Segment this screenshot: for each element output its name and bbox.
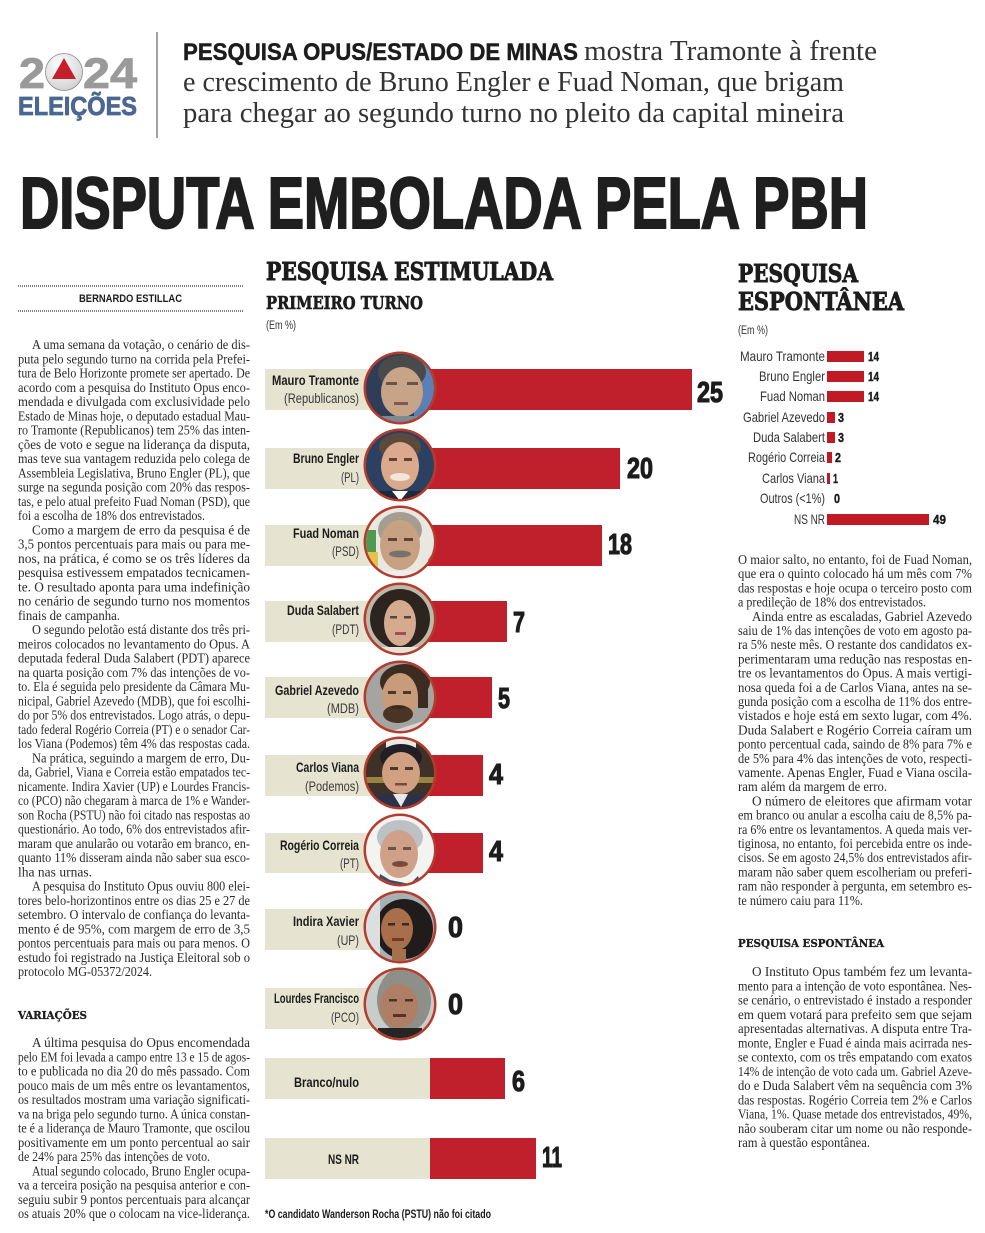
text block: right column article: ra 5% neste mês. O restante dos candidatos ex- <box>738 637 972 652</box>
bar chart: pesquisa espontânea: 49 <box>933 512 946 527</box>
row: Fuad Noman: Fuad Noman <box>293 525 359 541</box>
text block: main article: do por 5% dos entrevistados. Logo atrás, o depu- <box>18 708 250 722</box>
row: Fuad Noman: 18 <box>608 529 632 561</box>
text block: right column article: Duda Salabert e Rogério Correia caíram um <box>738 722 972 737</box>
bar chart: pesquisa espontânea: 14 <box>868 369 880 384</box>
text block: variações: pouco mais de um mês entre os levantamentos, <box>18 1078 250 1093</box>
bar chart: pesquisa espontânea: Gabriel Azevedo <box>743 409 825 425</box>
text block: pesquisa espontânea section: ram à questão espontânea. <box>738 1135 870 1150</box>
text block: main article: te. O resultado aponta para uma indefinição <box>18 579 250 594</box>
row: Lourdes Francisco <box>265 967 463 1040</box>
text block: main article: Estado de Minas hoje, o deputado estadual Mau- <box>18 408 250 423</box>
bar chart: pesquisa espontânea: 0 <box>834 491 840 506</box>
row: Bruno Engler: 20 <box>627 453 653 485</box>
text block: main article: protocolo MG-05372/2024. <box>18 964 152 979</box>
text block: main article: mento é de 95%, com margem de erro de 3,5 <box>18 921 250 936</box>
text block: right column article: vamente. Apenas Engler, Fuad e Viana oscila- <box>738 765 972 780</box>
text block: main article: tas, e pelo atual prefeito Fuad Noman (PSD), que <box>18 494 250 509</box>
row: Indira Xavier <box>265 890 463 964</box>
text block: variações: Atual segundo colocado, Bruno Engler ocupa- <box>32 1163 250 1178</box>
text block: main article: estudo foi registrado na Justiça Eleitoral sob o <box>18 950 250 965</box>
subtitle <box>183 36 877 129</box>
text block: main article: tores belo-horizontinos entre os dias 25 e 27 de <box>18 893 250 908</box>
row: Branco/nulo: Branco/nulo <box>294 1074 359 1090</box>
text block: variações: va na briga pelo segundo turno. A única constan- <box>18 1106 250 1121</box>
text block: right column article: vistados e hoje está em sexto lugar, com 4%. <box>738 708 972 723</box>
subtitle: para chegar ao segundo turno no pleito da capital mineira <box>183 98 845 129</box>
row: Duda Salabert: (PDT) <box>332 621 359 637</box>
text block: variações: seguiu subir 9 pontos percentuais para alcançar <box>18 1192 250 1207</box>
text block: pesquisa espontânea section: do e Duda Salabert vêm na sequência com 3% <box>738 1078 972 1093</box>
row: Rogério Correia <box>265 814 503 886</box>
text block: main article: to. Ela é seguida pelo presidente da Câmara Mu- <box>18 679 250 694</box>
bar chart: pesquisa espontânea: Mauro Tramonte <box>740 348 825 364</box>
text block: main article: tura de Belo Horizonte promete ser apertado. De <box>18 366 250 380</box>
row: Lourdes Francisco: 0 <box>448 989 463 1021</box>
text block: main article: surge na segunda posição com 20% das respos- <box>18 480 250 494</box>
row: Bruno Engler: (PL) <box>341 469 359 485</box>
row: Indira Xavier: (UP) <box>337 932 359 948</box>
text block: main article: mendada e divulgada com exclusividade pelo <box>18 394 250 409</box>
text block: right column article: nosa queda foi a de Carlos Viana, antes na se- <box>738 680 972 695</box>
logo: 2024 Eleições: 24 <box>83 50 137 98</box>
text block: right column article: ram além da margem de erro. <box>738 779 887 794</box>
text block: main article: nicamente. Indira Xavier (UP) e Lourdes Francis- <box>18 779 250 794</box>
row: Indira Xavier: Indira Xavier <box>293 913 359 929</box>
row: Lourdes Francisco: (PCO) <box>331 1009 359 1025</box>
text block: main article: ções de voto e segue na liderança da disputa, <box>18 437 250 452</box>
text block: pesquisa espontânea section: apresentadas alternativas. A disputa entre Tra- <box>738 1021 972 1036</box>
text block: right column article: de 5% para 4% das intenções de voto, respecti- <box>738 751 972 766</box>
heading: pesquisa estimulada <box>266 257 553 332</box>
row: Bruno Engler: Bruno Engler <box>293 450 359 466</box>
heading: variações: VARIAÇÕES <box>17 1008 87 1022</box>
byline: BERNARDO ESTILLAC <box>79 293 182 305</box>
bar chart: pesquisa estimulada <box>265 352 723 1179</box>
text block: main article: ro Tramonte (Republicanos) tem 25% das inten- <box>18 422 250 438</box>
text block: main article: A pesquisa do Instituto Opus ouviu 800 elei- <box>32 878 250 894</box>
heading: pesquisa espontânea: ESPONTÂNEA <box>738 287 904 316</box>
heading: pesquisa estimulada: PESQUISA ESTIMULADA <box>266 257 553 286</box>
row: Lourdes Francisco: Lourdes Francisco <box>274 990 359 1006</box>
text block: main article: deputada federal Duda Salabert (PDT) aparece <box>18 650 250 666</box>
row: Indira Xavier: 0 <box>448 912 463 944</box>
text block: right column article: a predileção de 18% dos entrevistados. <box>738 595 926 610</box>
text block: main article: O segundo pelotão está distante dos três pri- <box>32 622 250 637</box>
logo: 2024 Eleições <box>18 50 137 121</box>
text block: main article: puta pelo segundo turno na corrida pela Prefei- <box>18 351 250 366</box>
text block: right column article: perimentaram uma redução nas respostas en- <box>738 651 972 666</box>
text block: variações: os resultados mostram uma variação significati- <box>18 1092 250 1107</box>
bar chart: pesquisa espontânea: 14 <box>868 389 880 404</box>
bar chart: pesquisa espontânea: Carlos Viana <box>762 470 825 486</box>
text block: pesquisa espontânea section: não souberam citar um nome ou não responde- <box>738 1121 972 1136</box>
text block: right column article: te número caiu para 11%. <box>738 893 863 908</box>
text block: variações: te é a liderança de Mauro Tramonte, que oscilou <box>18 1120 250 1136</box>
text block: variações: de 24% para 25% das intenções de voto. <box>18 1149 210 1164</box>
row: Gabriel Azevedo: Gabriel Azevedo <box>275 682 359 698</box>
row: Fuad Noman <box>265 506 632 579</box>
text block: main article: nos, na prática, é como se os três líderes da <box>18 551 250 566</box>
heading: pesquisa espontânea section: PESQUISA ESPONTÂNEA <box>738 936 884 950</box>
logo: 2024 Eleições: ELEIÇÕES <box>18 91 137 121</box>
footnote: *O candidato Wanderson Rocha (PSTU) não foi citado <box>265 1209 491 1221</box>
text block: main article: no cenário de segundo turno nos momentos <box>18 594 250 608</box>
text block: variações: os atuais 20% que o colocam na vice-liderança. <box>18 1206 250 1221</box>
bar chart: pesquisa espontânea: 3 <box>838 430 844 445</box>
bar chart: pesquisa espontânea: NS NR <box>794 511 825 527</box>
heading: pesquisa estimulada: (Em %) <box>266 320 296 332</box>
row: Duda Salabert: 7 <box>513 607 525 639</box>
bar chart: pesquisa espontânea: 2 <box>835 450 841 465</box>
row: Duda Salabert <box>265 582 525 656</box>
text block: right column article: Ainda entre as escaladas, Gabriel Azevedo <box>752 609 972 624</box>
text block: variações: pelo EM foi levada a campo entre 13 e 15 de agos- <box>18 1049 250 1064</box>
heading: pesquisa espontânea: (Em %) <box>738 325 768 337</box>
text block: pesquisa espontânea section: O Instituto Opus também fez um levanta- <box>752 964 972 979</box>
bar chart: pesquisa espontânea: Fuad Noman <box>760 388 825 404</box>
text block: variações: va a terceira posição na pesquisa anterior e con- <box>18 1178 250 1192</box>
row: Branco/nulo <box>265 1058 525 1099</box>
bar chart: pesquisa espontânea: Bruno Engler <box>759 368 825 384</box>
text block: variações <box>18 1035 250 1221</box>
heading: pesquisa espontânea <box>738 259 904 337</box>
text block: main article: foi a escolha de 18% dos entrevistados. <box>18 508 205 523</box>
row: Duda Salabert: Duda Salabert <box>287 602 359 618</box>
bar chart: pesquisa espontânea: Rogério Correia <box>748 449 825 465</box>
text block: main article: A uma semana da votação, o cenário de dis- <box>32 337 250 352</box>
bar chart: pesquisa espontânea <box>740 348 946 527</box>
row: Rogério Correia: Rogério Correia <box>280 837 359 853</box>
row: Carlos Viana: 4 <box>489 759 503 791</box>
text block: variações: to e publicada no dia 20 do mês passado. Com <box>18 1064 250 1078</box>
logo: 2024 Eleições: 2 <box>19 50 45 98</box>
text block: main article: co (PCO) não chegaram à marca de 1% e Wander- <box>18 793 250 808</box>
text block: right column article: que era o quinto colocado há um mês com 7% <box>738 566 972 581</box>
text block: main article: finais de campanha. <box>18 608 120 623</box>
row: Carlos Viana: (Podemos) <box>305 778 359 794</box>
text block: pesquisa espontânea section <box>738 964 972 1150</box>
text block: main article: tado federal Rogério Correia (PT) e o senador Car- <box>18 722 250 737</box>
text block: main article: mas teve sua vantagem reduzida pelo colega de <box>18 451 250 466</box>
bar chart: pesquisa espontânea: Duda Salabert <box>753 429 825 445</box>
row: Mauro Tramonte <box>265 352 723 426</box>
row: Rogério Correia: (PT) <box>340 855 359 871</box>
text block: main article: maram que anularão ou votarão em branco, en- <box>18 836 250 851</box>
row: Branco/nulo: 6 <box>512 1066 525 1098</box>
row: Mauro Tramonte: 25 <box>697 377 723 409</box>
row: Gabriel Azevedo <box>265 660 510 734</box>
text block: right column article <box>738 552 972 908</box>
text block: main article: meiros colocados no levantamento do Opus. A <box>18 636 250 651</box>
text block: main article: setembro. O intervalo de confiança do levanta- <box>18 907 250 922</box>
text block: main article: da, Gabriel, Viana e Correia estão empatados tec- <box>18 764 250 780</box>
row: Mauro Tramonte: Mauro Tramonte <box>272 372 359 388</box>
row: Carlos Viana <box>265 736 503 810</box>
text block: right column article: O número de eleitores que afirmam votar <box>752 793 972 808</box>
text block: main article: 3,5 pontos percentuais para mais ou para me- <box>18 536 250 552</box>
text block: main article: los Viana (Podemos) têm 4% das respostas cada. <box>18 736 250 751</box>
row: Gabriel Azevedo: 5 <box>498 683 510 715</box>
bar chart: pesquisa espontânea: 3 <box>838 410 844 425</box>
text block: right column article: O maior salto, no entanto, foi de Fuad Noman, <box>738 552 972 567</box>
subtitle: e crescimento de Bruno Engler e Fuad Noman, que brigam <box>183 67 844 98</box>
text block: main article: pontos percentuais para mais ou para menos. O <box>18 936 250 950</box>
text block: main article: nicipal, Gabriel Azevedo (MDB), que foi escolhi- <box>18 693 250 708</box>
text block: main article: questionário. Ao todo, 6% dos entrevistados afir- <box>18 822 250 836</box>
subtitle: PESQUISA OPUS/ESTADO DE MINAS <box>183 39 578 66</box>
row: Gabriel Azevedo: (MDB) <box>327 700 359 716</box>
text block: main article: na quarta posição com 7% das intenções de vo- <box>18 665 250 680</box>
text block: main article: lha nas urnas. <box>18 864 92 879</box>
text block: main article: son Rocha (PSTU) não foi citado nas respostas ao <box>18 807 250 822</box>
bar chart: pesquisa espontânea: 1 <box>833 471 838 486</box>
bar chart: pesquisa espontânea: Outros (<1%) <box>760 490 825 506</box>
row: Bruno Engler <box>265 428 653 503</box>
text block: main article: quanto 11% disseram ainda não saber sua esco- <box>18 850 250 865</box>
row: Fuad Noman: (PSD) <box>332 543 359 559</box>
text block: main article: Assembleia Legislativa, Bruno Engler (PL), que <box>18 465 250 480</box>
text block: main article: Como a margem de erro da pesquisa é de <box>32 522 250 537</box>
text block: main article <box>18 337 250 979</box>
row: NS NR: 11 <box>542 1142 562 1174</box>
bar chart: pesquisa espontânea: 14 <box>868 349 880 364</box>
text block: variações: A última pesquisa do Opus encomendada <box>32 1035 250 1050</box>
row: Mauro Tramonte: (Republicanos) <box>284 390 359 406</box>
row: NS NR <box>265 1138 562 1179</box>
subtitle: mostra Tramonte à frente <box>584 36 877 67</box>
text block: pesquisa espontânea section: em quem votará para prefeito sem que sejam <box>738 1007 972 1022</box>
heading: pesquisa espontânea: PESQUISA <box>738 259 858 288</box>
heading: pesquisa estimulada: PRIMEIRO TURNO <box>266 294 423 314</box>
text block: main article: acordo com a pesquisa do Instituto Opus enco- <box>18 380 250 395</box>
text block: variações: positivamente em um ponto percentual ao sair <box>18 1135 250 1150</box>
row: NS NR: NS NR <box>328 1151 359 1167</box>
text block: main article: pesquisa estivessem empatados tecnicamen- <box>18 565 250 580</box>
text block: main article: Na prática, seguindo a margem de erro, Du- <box>32 750 250 765</box>
text block: right column article: tre os levantamentos do Opus. A mais vertigi- <box>738 666 972 681</box>
row: Carlos Viana: Carlos Viana <box>296 759 359 775</box>
row: Rogério Correia: 4 <box>489 836 503 868</box>
